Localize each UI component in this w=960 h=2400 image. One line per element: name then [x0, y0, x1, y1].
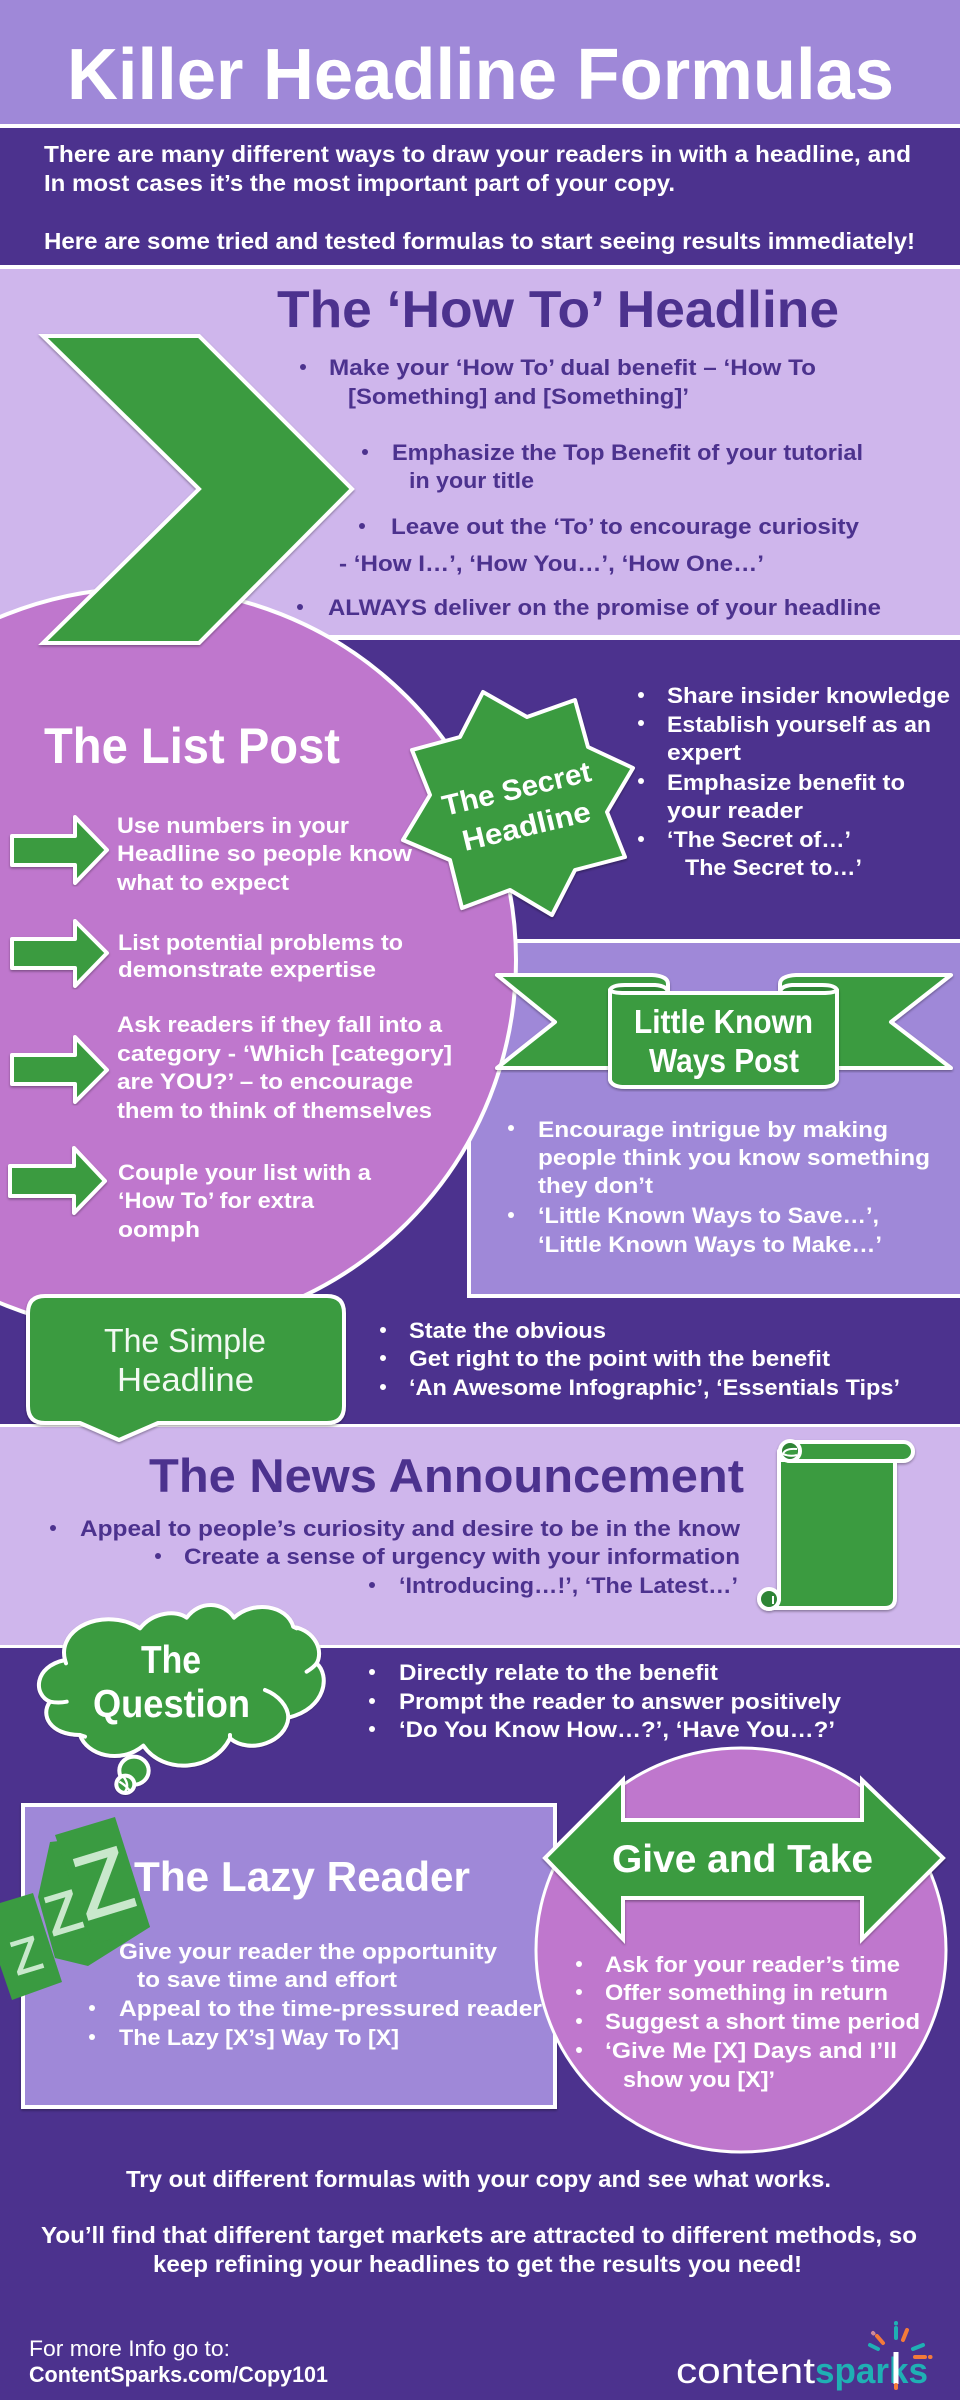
- panel: lazy reader: The Lazy [X’s] Way To [X]: [119, 2025, 399, 2050]
- ribbon: little known ways post: Little Known: [634, 1003, 813, 1040]
- panel: news announcement: [0, 1424, 960, 1648]
- list item four: ‘How To’ for extra: [118, 1188, 315, 1213]
- question bullets: ‘Do You Know How…?’, ‘Have You…?’: [399, 1717, 835, 1742]
- simple headline bullets: Get right to the point with the benefit: [409, 1346, 831, 1371]
- simple headline bullets: [380, 1318, 900, 1400]
- panel: list post circle: The List Post: [44, 718, 340, 774]
- list item two: demonstrate expertise: [118, 957, 376, 982]
- list item three: them to think of themselves: [117, 1098, 432, 1123]
- panel: how to headline: Leave out the ‘To’ to encourage curiosity: [391, 514, 860, 539]
- secret headline bullets: expert: [667, 740, 742, 765]
- icon: thought cloud with the question: [39, 1605, 324, 1793]
- title banner: Killer Headline Formulas: [67, 35, 894, 115]
- secret headline bullets: ‘The Secret of…’: [667, 827, 851, 852]
- list item three: category - ‘Which [category]: [117, 1041, 452, 1066]
- secret headline bullets: Emphasize benefit to: [667, 770, 905, 795]
- panel: secret headline star: The Secret: [439, 756, 595, 823]
- icon: thought cloud with the question: The: [141, 1639, 201, 1682]
- panel: how to headline: The ‘How To’ Headline: [277, 281, 839, 339]
- panel: give and take: Suggest a short time period: [605, 2009, 920, 2034]
- intro text: [44, 141, 915, 254]
- ribbon: little known ways post: Ways Post: [649, 1042, 799, 1079]
- panel: give and take: show you [X]’: [623, 2067, 775, 2092]
- panel: news announcement: The News Announcement: [149, 1449, 744, 1502]
- icon: arrow one: [12, 817, 107, 883]
- panel: how to headline: - ‘How I…’, ‘How You…’, ‘How One…’: [339, 551, 764, 576]
- icon: sleeping z tiles: Z: [38, 1877, 89, 1948]
- icon: how to chevron: [43, 336, 352, 643]
- closing text: Try out different formulas with your copy and see what works.: [126, 2166, 831, 2192]
- list item three: [117, 1012, 452, 1123]
- panel: little known ways box: they don’t: [538, 1173, 654, 1198]
- icon: double arrow: [545, 1780, 943, 1939]
- callout: simple headline: The Simple: [104, 1322, 266, 1359]
- panel: give and take: Give and Take: [612, 1838, 873, 1881]
- ribbon: little known ways post: [497, 975, 951, 1087]
- question bullets: Directly relate to the benefit: [399, 1660, 719, 1685]
- callout: simple headline: [28, 1296, 344, 1440]
- footer link: [29, 2336, 328, 2387]
- icon: sleeping z tiles: [0, 1817, 150, 2000]
- footer link: ContentSparks.com/Copy101: [29, 2362, 328, 2387]
- panel: give and take: [536, 1748, 946, 2152]
- callout: simple headline: Headline: [117, 1361, 254, 1398]
- logo: contentsparks: content: [676, 2350, 815, 2391]
- simple headline bullets: ‘An Awesome Infographic’, ‘Essentials Tips’: [409, 1375, 900, 1400]
- logo: contentsparks: [676, 2323, 930, 2391]
- intro text: Here are some tried and tested formulas to start seeing results immediately!: [44, 228, 915, 254]
- list item four: oomph: [118, 1217, 200, 1242]
- panel: give and take: ‘Give Me [X] Days and I’ll: [605, 2038, 897, 2063]
- list item two: [118, 930, 403, 982]
- panel: secret headline star: [403, 692, 633, 915]
- panel: give and take: Offer something in return: [605, 1980, 888, 2005]
- icon: arrow three: [12, 1037, 107, 1102]
- icon: sleeping z tiles: Z: [5, 1927, 48, 1986]
- list item one: Use numbers in your: [117, 813, 349, 838]
- panel: lazy reader: to save time and effort: [137, 1967, 398, 1992]
- secret headline bullets: The Secret to…’: [685, 855, 862, 880]
- list item four: [118, 1160, 372, 1242]
- simple headline bullets: State the obvious: [409, 1318, 606, 1343]
- panel: list post circle: [0, 588, 516, 1332]
- cloud shape: [39, 1605, 324, 1793]
- panel: news announcement: Appeal to people’s curiosity and desire to be in the know: [80, 1516, 741, 1541]
- icon: thought cloud with the question: Question: [93, 1683, 250, 1726]
- secret headline bullets: Share insider knowledge: [667, 683, 950, 708]
- panel: how to headline: [0, 265, 960, 640]
- title banner: [0, 0, 960, 128]
- panel: little known ways box: ‘Little Known Ways to Make…’: [538, 1232, 882, 1257]
- panel: how to headline: ALWAYS deliver on the promise of your headline: [328, 595, 881, 620]
- list item two: List potential problems to: [118, 930, 403, 955]
- logo: contentsparks: sparks: [815, 2350, 928, 2391]
- footer link: For more Info go to:: [29, 2336, 230, 2361]
- secret headline bullets: Establish yourself as an: [667, 712, 931, 737]
- panel: little known ways box: ‘Little Known Ways to Save…’,: [538, 1203, 879, 1228]
- icon: scroll: [759, 1441, 913, 1609]
- panel: give and take: Ask for your reader’s time: [605, 1952, 900, 1977]
- intro text: There are many different ways to draw your readers in with a headline, and: [44, 141, 911, 167]
- icon: sleeping z tiles: Z: [63, 1828, 144, 1940]
- closing text: keep refining your headlines to get the results you need!: [153, 2251, 802, 2277]
- panel: how to headline: Emphasize the Top Benefit of your tutorial: [392, 440, 863, 465]
- list item one: [116, 813, 413, 895]
- list item one: Headline so people know: [117, 841, 413, 866]
- panel: little known ways box: people think you know something: [538, 1145, 930, 1170]
- intro text: In most cases it’s the most important part of your copy.: [44, 170, 675, 196]
- closing text: [41, 2166, 917, 2277]
- icon: arrow two: [12, 921, 107, 986]
- panel: lazy reader: The Lazy Reader: [134, 1853, 470, 1900]
- panel: how to headline: in your title: [409, 468, 534, 493]
- panel: news announcement: Create a sense of urgency with your information: [184, 1544, 740, 1569]
- secret headline bullets: your reader: [667, 798, 803, 823]
- panel: secret headline star: Headline: [459, 796, 594, 858]
- panel: how to headline: Make your ‘How To’ dual benefit – ‘How To: [329, 355, 816, 380]
- panel: lazy reader: Appeal to the time-pressured reader: [119, 1996, 542, 2021]
- list item one: what to expect: [116, 870, 290, 895]
- icon: arrow four: [10, 1148, 105, 1213]
- panel: lazy reader: Give your reader the opportunity: [119, 1939, 498, 1964]
- panel: how to headline: [Something] and [Something]’: [348, 384, 689, 409]
- list item four: Couple your list with a: [118, 1160, 372, 1185]
- icon: spark rays and pencil: [870, 2323, 930, 2388]
- panel: lazy reader: [23, 1805, 555, 2107]
- question bullets: Prompt the reader to answer positively: [399, 1689, 842, 1714]
- secret headline bullets: [638, 683, 950, 880]
- panel: little known ways box: [469, 941, 960, 1296]
- list item three: are YOU?’ – to encourage: [117, 1069, 413, 1094]
- list item three: Ask readers if they fall into a: [117, 1012, 443, 1037]
- question bullets: [369, 1660, 842, 1742]
- panel: news announcement: ‘Introducing…!’, ‘The Latest…’: [399, 1573, 738, 1598]
- panel: little known ways box: Encourage intrigue by making: [538, 1117, 888, 1142]
- closing text: You’ll find that different target markets are attracted to different methods, so: [41, 2222, 917, 2248]
